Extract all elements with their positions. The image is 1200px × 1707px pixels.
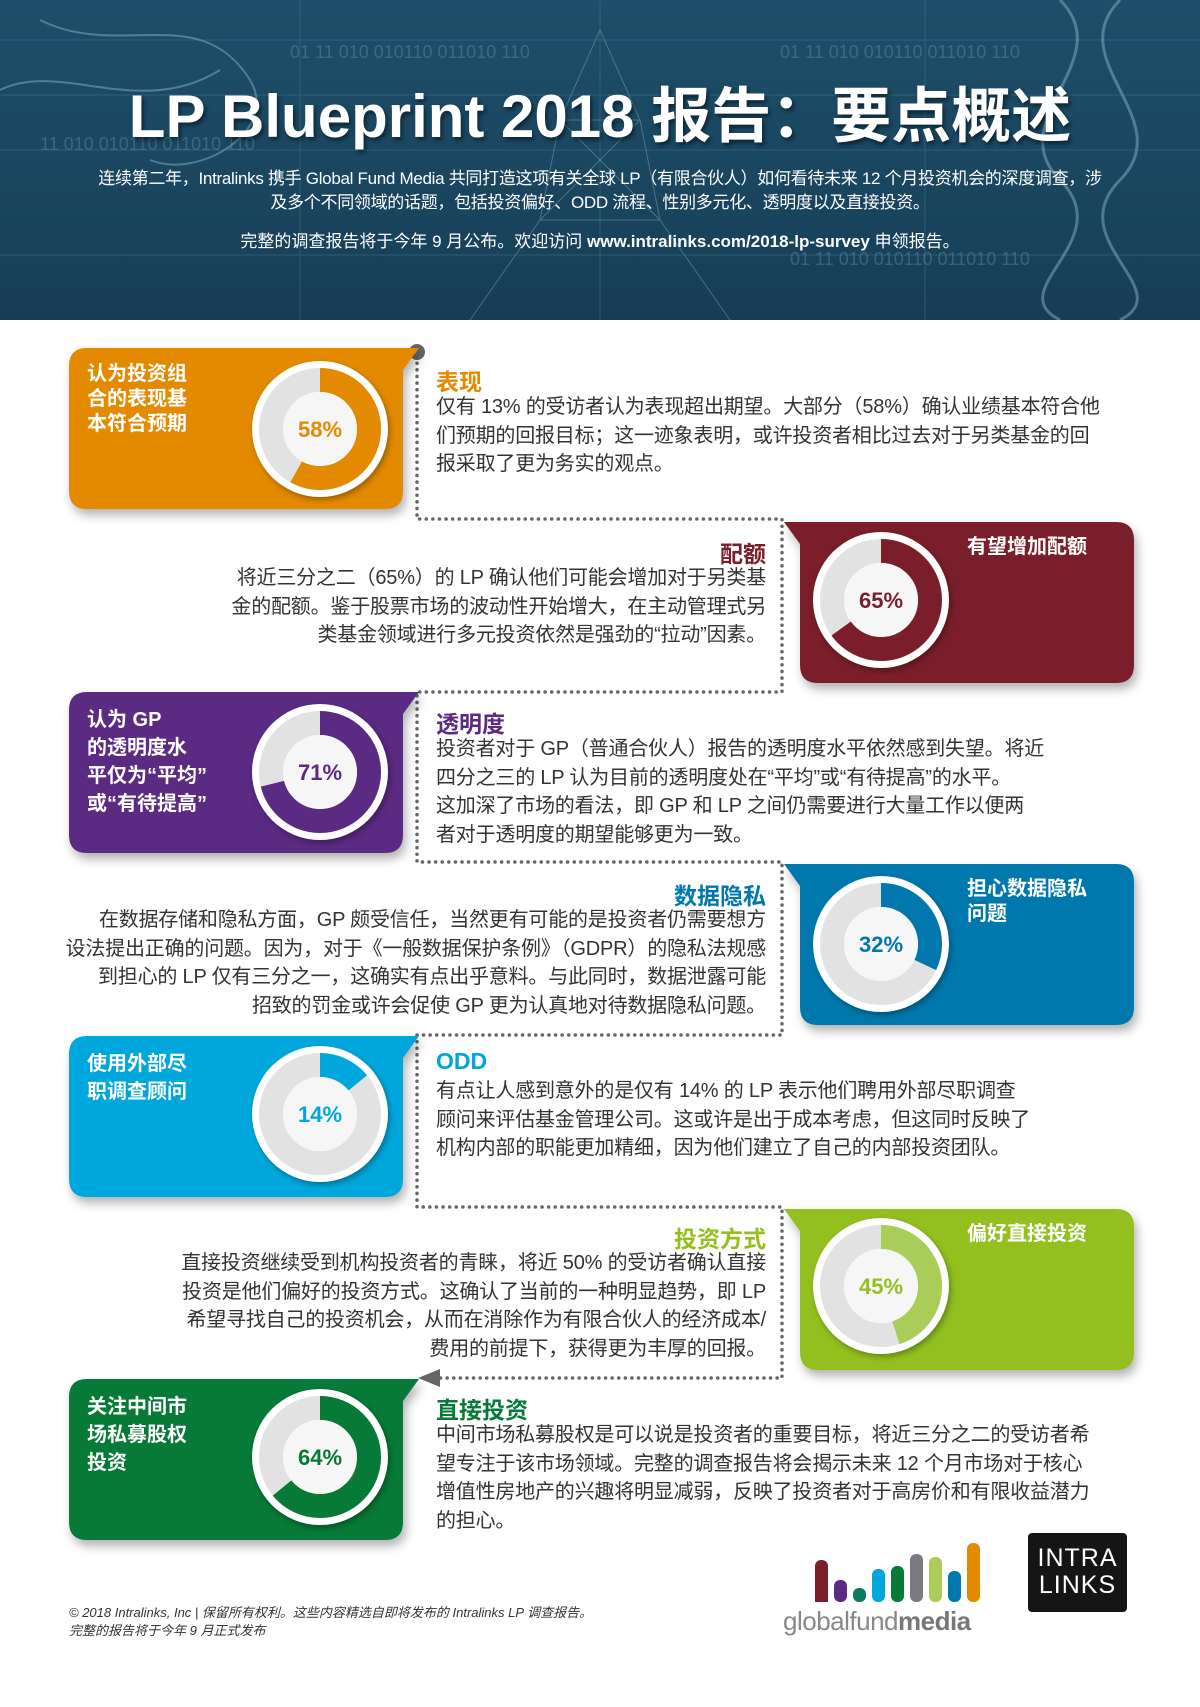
text: data privacy: 在数据存储和隐私方面，GP 颇受信任，当然更有可能的是投资者仍需要想方 xyxy=(99,909,766,931)
panel: performance card xyxy=(66,348,424,521)
donut chart 71%: 71% xyxy=(298,760,342,785)
text: transparency: 这加深了市场的看法，即 GP 和 LP 之间仍需要进行大量工作以便两 xyxy=(436,795,1024,817)
donut chart 14% xyxy=(251,1046,393,1188)
card label: 认为投资组 xyxy=(87,363,187,385)
card label: 合的表现基 xyxy=(87,388,187,410)
panel: ODD card xyxy=(66,1036,424,1209)
text: investment style: 费用的前提下，获得更为丰厚的回报。 xyxy=(429,1338,766,1360)
card label: 有望增加配额 xyxy=(967,536,1087,558)
text: transparency: 投资者对于 GP（普通合伙人）报告的透明度水平依然感到失望。将近 xyxy=(436,738,1044,760)
footer copyright xyxy=(69,1605,592,1638)
text: transparency xyxy=(436,738,1044,846)
card label xyxy=(967,878,1087,925)
donut chart 45% xyxy=(812,1218,954,1360)
header decoration: 11 010 010110 011010 110 xyxy=(40,134,255,154)
text: allocation: 类基金领域进行多元投资依然是强劲的“拉动”因素。 xyxy=(317,624,766,646)
card label: 使用外部尽 xyxy=(87,1053,187,1075)
card label: 认为 GP xyxy=(87,709,161,731)
text: transparency: 者对于透明度的期望能够更为一致。 xyxy=(436,824,753,846)
heading: 投资方式: 投资方式 xyxy=(674,1226,766,1252)
text: investment style: 直接投资继续受到机构投资者的青睐，将近 50% 的受访者确认直接 xyxy=(181,1252,766,1274)
text: data privacy: 设法提出正确的问题。因为，对于《一般数据保护条例》（GDPR）的隐私法规感 xyxy=(66,938,766,960)
text: direct investment: 望专注于该市场领域。完整的调查报告将会揭示未来 12 个月市场对于核心 xyxy=(436,1452,1082,1474)
text: data privacy: 到担心的 LP 仅有三分之一，这确实有点出乎意料。与此同时，数据泄露可能 xyxy=(98,966,766,988)
donut chart 71% xyxy=(252,704,392,846)
text: allocation xyxy=(231,567,766,646)
heading: 数据隐私: 数据隐私 xyxy=(674,883,766,909)
text: data privacy: 招致的罚金或许会促使 GP 更为认真地对待数据隐私问题。 xyxy=(252,994,766,1016)
text: ODD: 顾问来评估基金管理公司。这或许是出于成本考虑，但这同时反映了 xyxy=(436,1108,1030,1130)
card label xyxy=(87,362,187,435)
text: allocation: 将近三分之二（65%）的 LP 确认他们可能会增加对于另类基 xyxy=(237,567,766,589)
logo: Intralinks: INTRA xyxy=(1038,1544,1118,1572)
text: transparency: 四分之三的 LP 认为目前的透明度处在“平均”或“有待提高”的水平。 xyxy=(436,766,1011,788)
donut chart 65%: 65% xyxy=(859,588,903,613)
logo: globalfundmedia xyxy=(783,1543,980,1636)
donut chart 14%: 14% xyxy=(298,1102,342,1127)
logo: globalfundmedia: globalfundmedia xyxy=(783,1606,971,1636)
card label: 偏好直接投资 xyxy=(967,1223,1087,1245)
donut chart 64% xyxy=(252,1389,392,1530)
intro text: 连续第二年，Intralinks 携手 Global Fund Media 共同打造这项有关全球 LP（有限合伙人）如何看待未来 12 个月投资机会的深度调查，涉 xyxy=(98,169,1102,188)
card label: 职调查顾问 xyxy=(87,1081,187,1103)
card label: 投资 xyxy=(87,1452,127,1474)
header decoration: 01 11 010 010110 011010 110 xyxy=(290,42,530,62)
heading: 透明度: 透明度 xyxy=(436,711,505,737)
card label: 场私募股权 xyxy=(87,1424,187,1446)
text: ODD xyxy=(436,1080,1030,1159)
card label: 关注中间市 xyxy=(87,1396,187,1418)
donut chart 65% xyxy=(813,532,953,673)
header banner xyxy=(0,0,1200,320)
text: direct investment: 中间市场私募股权是可以说是投资者的重要目标，将近三分之二的受访者希 xyxy=(436,1424,1089,1446)
text: investment style xyxy=(181,1252,766,1360)
survey link text: 完整的调查报告将于今年 9 月公布。欢迎访问 www.intralinks.com/2018-lp-survey 申领报告。 xyxy=(240,232,960,251)
intro text xyxy=(98,169,1102,212)
donut chart 32%: 32% xyxy=(859,932,903,957)
intro text: 及多个不同领域的话题，包括投资偏好、ODD 流程、性别多元化、透明度以及直接投资。 xyxy=(270,193,930,212)
footer copyright: © 2018 Intralinks, Inc | 保留所有权利。这些内容精选自即将发布的 Intralinks LP 调查报告。 xyxy=(69,1605,592,1620)
text: allocation: 金的配额。鉴于股票市场的波动性开始增大，在主动管理式另 xyxy=(231,596,766,618)
heading: 直接投资: 直接投资 xyxy=(436,1397,528,1423)
donut chart 58%: 58% xyxy=(298,417,342,442)
panel: investment style card xyxy=(784,1209,1143,1382)
text: direct investment: 的担心。 xyxy=(436,1510,515,1532)
panel: transparency card xyxy=(66,692,424,865)
heading: 表现: 表现 xyxy=(436,369,482,395)
text: performance xyxy=(436,396,1100,475)
text: performance: 仅有 13% 的受访者认为表现超出期望。大部分（58%）确认业绩基本符合他 xyxy=(436,396,1100,418)
footer copyright: 完整的报告将于今年 9 月正式发布 xyxy=(69,1623,265,1638)
logo: Intralinks: LINKS xyxy=(1039,1571,1116,1599)
panel: allocation card xyxy=(784,522,1143,695)
card label xyxy=(87,1052,187,1103)
header decoration xyxy=(0,0,1200,320)
donut chart 45%: 45% xyxy=(859,1274,903,1299)
panel: data privacy card xyxy=(784,864,1143,1037)
card label: 平仅为“平均” xyxy=(87,765,207,787)
card label: 本符合预期 xyxy=(87,413,187,435)
text: performance: 们预期的回报目标；这一迹象表明，或许投资者相比过去对于另类基金的回 xyxy=(436,424,1089,446)
card label: 的透明度水 xyxy=(87,737,187,759)
card label: 担心数据隐私 xyxy=(967,878,1087,900)
card label xyxy=(87,708,207,815)
text: data privacy xyxy=(66,909,766,1016)
text: investment style: 投资是他们偏好的投资方式。这确认了当前的一种明显趋势，即 LP xyxy=(182,1280,766,1302)
header decoration: 01 11 010 010110 011010 110 xyxy=(780,42,1020,62)
panel: mid-market PE card xyxy=(66,1379,424,1552)
header decoration: 01 11 010 010110 011010 110 xyxy=(790,249,1030,269)
donut chart 32% xyxy=(812,876,954,1018)
text: ODD: 机构内部的职能更加精细，因为他们建立了自己的内部投资团队。 xyxy=(436,1137,1010,1159)
heading: 配额: 配额 xyxy=(720,541,766,567)
card label: 或“有待提高” xyxy=(87,793,207,815)
text: direct investment xyxy=(436,1424,1089,1532)
text: performance: 报采取了更为务实的观点。 xyxy=(436,453,674,475)
card label xyxy=(87,1396,187,1474)
heading: ODD: ODD xyxy=(436,1048,487,1074)
card label: 问题 xyxy=(967,903,1007,925)
donut chart 58% xyxy=(251,361,393,503)
text: investment style: 希望寻找自己的投资机会，从而在消除作为有限合伙人的经济成本/ xyxy=(186,1309,766,1331)
text: ODD: 有点让人感到意外的是仅有 14% 的 LP 表示他们聘用外部尽职调查 xyxy=(436,1080,1016,1102)
donut chart 64%: 64% xyxy=(298,1445,342,1470)
logo: Intralinks xyxy=(1028,1533,1127,1612)
text: direct investment: 增值性房地产的兴趣将明显减弱，反映了投资者对于高房价和有限收益潜力 xyxy=(436,1481,1089,1503)
title: LP Blueprint 2018 报告：要点概述 xyxy=(129,83,1071,150)
